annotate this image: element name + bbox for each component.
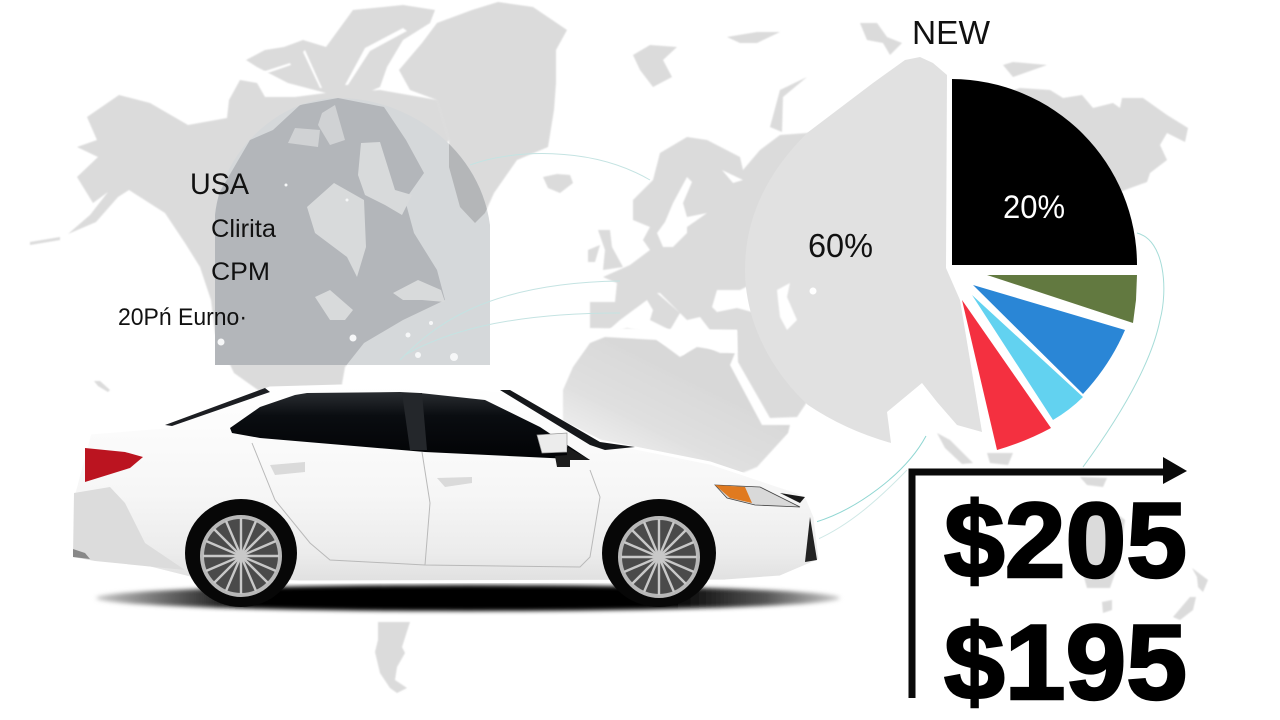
map: Eurasia west [590, 120, 900, 418]
rear roof strip [165, 388, 270, 426]
translucent arch panel over North America [215, 98, 500, 367]
map: Hawaii islands [94, 381, 110, 392]
map: Arctic islands [246, 5, 435, 97]
connection line: pie to price [1083, 233, 1164, 467]
map: Franz Josef Land [727, 32, 780, 43]
front grille [780, 493, 805, 503]
map: Novaya Zemlya [770, 77, 807, 132]
rear door handle [270, 462, 305, 475]
market share pie chart [808, 79, 1137, 450]
tail light [85, 448, 143, 482]
arch: Great Lakes east [393, 280, 445, 302]
arch: Baffin area [358, 142, 412, 215]
price: $205: $205 [944, 480, 1187, 600]
map: Borneo [987, 453, 1013, 465]
map: New Siberian islands [1003, 62, 1047, 77]
map: Africa [563, 337, 790, 490]
connection line: car to Asia [816, 436, 926, 522]
sea: White Sea [722, 170, 743, 183]
map: Indochina and Malaya [937, 433, 973, 464]
arch background [346, 142, 490, 365]
map: Ireland [588, 245, 600, 262]
rear wheel tyre [185, 499, 297, 607]
front intake [805, 517, 817, 562]
windshield trim [500, 390, 635, 450]
pie slice: light blue [972, 295, 1083, 420]
rear lower panel [73, 487, 185, 570]
rear wheel [185, 499, 297, 607]
arrow head [1163, 457, 1187, 484]
pie slice: 20% black [952, 79, 1137, 265]
front wheel rim [620, 518, 698, 596]
heading: NEW: NEW [912, 14, 991, 51]
label: China: Clirita [211, 215, 276, 243]
arch: northern patch one [318, 105, 345, 145]
country labels [118, 168, 276, 331]
window pillar [402, 393, 427, 450]
front wheel spokes [621, 519, 697, 595]
front door handle [437, 477, 472, 487]
label: CPM: CPM [211, 258, 270, 286]
map: North America [68, 80, 449, 395]
price: $195: $195 [944, 602, 1187, 720]
map: United Kingdom [598, 230, 623, 270]
map: Svalbard [633, 45, 677, 87]
map: Iceland [543, 174, 573, 193]
windows [230, 392, 590, 460]
connection line: car lower [816, 470, 907, 540]
arch: Greenland dark tone [449, 144, 487, 223]
map: South America tip [375, 622, 410, 693]
pie slice: blue [973, 285, 1125, 394]
label: USA: USA [190, 168, 249, 201]
map: New Zealand south [1173, 597, 1196, 620]
sea: Black Sea [712, 284, 752, 312]
white car [72, 386, 840, 611]
connection line: north arc [470, 154, 650, 180]
white seas and channels [262, 28, 752, 355]
map: Caspian Sea [777, 283, 797, 330]
pie label: 20%: 20% [1003, 189, 1065, 225]
price axis arrow [912, 472, 1168, 698]
map: Aral Sea [810, 288, 816, 294]
exhaust tip [73, 549, 90, 559]
price panel [912, 457, 1187, 720]
headlight [715, 485, 800, 507]
label: Europe share: 20Pń Eurno· [118, 304, 247, 331]
arch: Great Lakes west [315, 290, 353, 320]
map: Aleutian islands [30, 237, 60, 245]
pie slice: green [987, 275, 1137, 323]
car ground shadow [96, 585, 840, 611]
channels: arctic islands [262, 28, 407, 88]
arch: northern patch two [288, 128, 320, 147]
map: Severnaya Zemlya [860, 23, 902, 55]
front wheel [602, 499, 716, 607]
connection line: mid arc [405, 313, 620, 355]
mirror mount [555, 447, 590, 467]
60 percent pie slice [745, 57, 982, 443]
map: Australia [1078, 505, 1125, 588]
arch: land dark tone [215, 98, 445, 367]
door lines [252, 443, 600, 567]
pie label: 60%: 60% [808, 227, 873, 264]
rear wheel spokes [203, 518, 279, 594]
connection line: atlantic arc [400, 281, 620, 360]
pie slice: red [962, 300, 1051, 450]
map: Greenland [399, 2, 567, 223]
map: Asia east [1000, 88, 1188, 200]
sea: Mediterranean [603, 293, 737, 355]
rear wheel rim [202, 517, 280, 595]
map: Tasmania [1102, 600, 1112, 613]
headlight amber [715, 485, 752, 503]
arch: Hudson Bay [307, 183, 366, 277]
front wheel tyre [602, 499, 716, 607]
arch: white dots [218, 184, 458, 361]
sea: Baltic [657, 177, 707, 247]
map: New Zealand north [1192, 568, 1208, 592]
side mirror [537, 433, 567, 453]
connection lines [400, 154, 1164, 540]
car body [72, 386, 820, 582]
map: New Guinea [1080, 477, 1107, 487]
